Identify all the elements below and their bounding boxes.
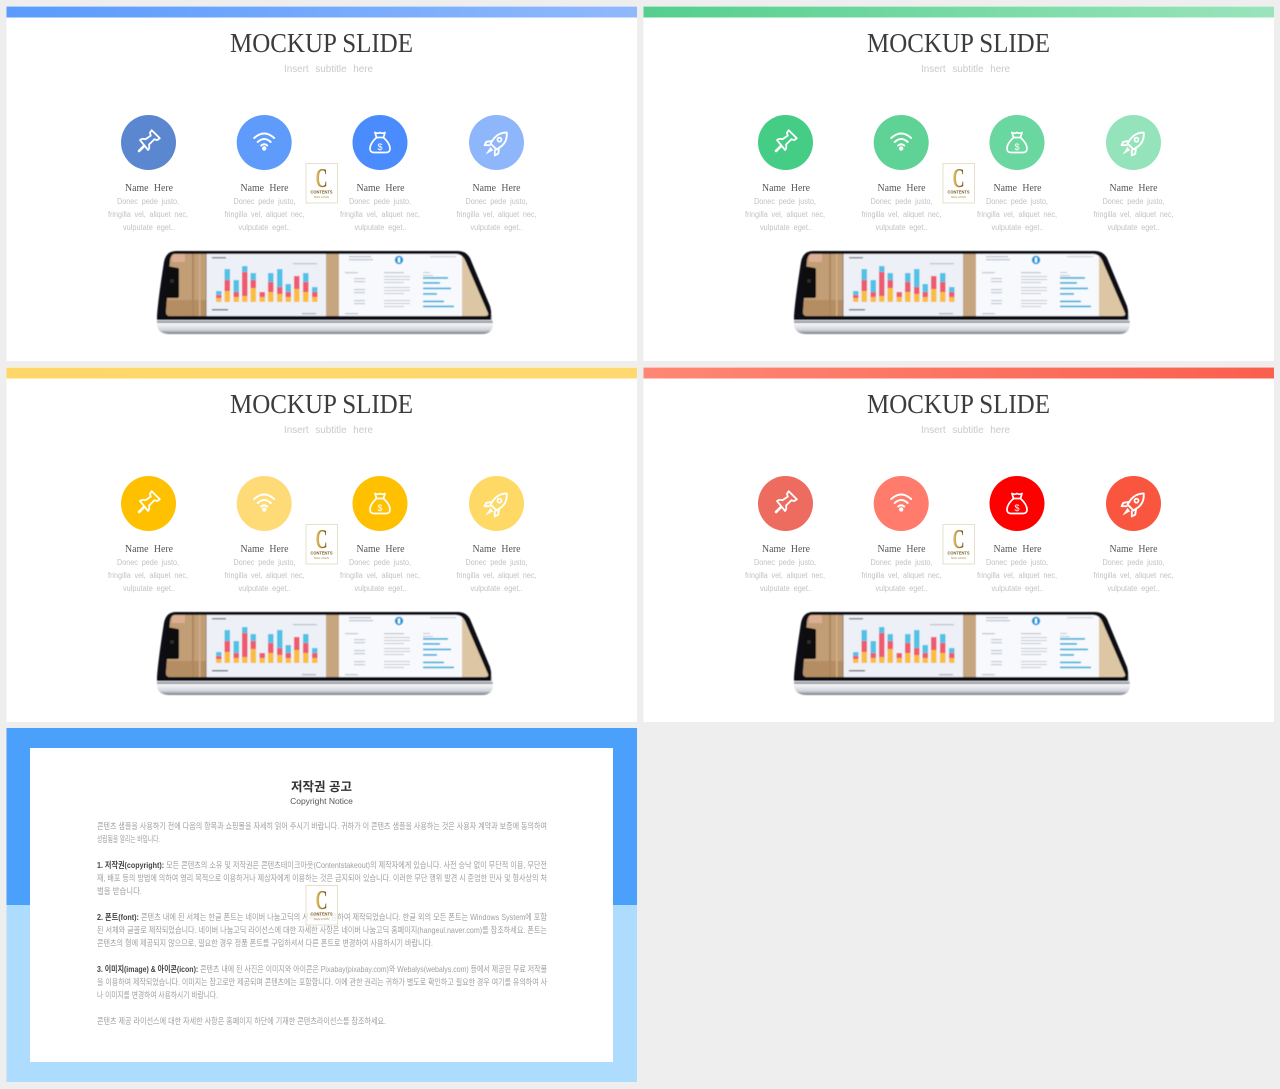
panel: yellow mockup slide: Donec pede justo, (466, 558, 528, 567)
panel: copyright notice: 저작권 공고 (291, 779, 352, 794)
panel: blue mockup slide: fringilla vel, aliquet nec, (108, 210, 188, 219)
panel: blue mockup slide: fringilla vel, aliquet nec, (456, 210, 536, 219)
panel: yellow mockup slide: $ (377, 503, 383, 513)
panel: yellow mockup slide: Name Here (356, 544, 405, 555)
panel: yellow mockup slide: C (316, 524, 328, 554)
panel: red mockup slide: $ (1014, 503, 1020, 513)
panel: green mockup slide: Insert subtitle here (921, 64, 1010, 75)
panel: copyright notice: 콘텐츠 제공 라이선스에 대한 자세한 사항은 홈페이지 하단에 기재한 콘텐츠라이선스를 참조하세요. (97, 1016, 386, 1026)
panel: green mockup slide: MOCKUP SLIDE (867, 28, 1050, 58)
panel: blue mockup slide: vulputate eget.. (470, 223, 522, 232)
panel: red mockup slide: Name Here (1110, 544, 1158, 555)
panel: yellow mockup slide: MOCKUP SLIDE (230, 389, 413, 419)
panel: green mockup slide: $ (1014, 142, 1020, 152)
panel: red mockup slide: Donec pede justo, (754, 558, 816, 567)
panel: blue mockup slide: Donec pede justo, (466, 197, 528, 206)
panel: green mockup slide: fringilla vel, aliquet nec, (745, 210, 825, 219)
panel: yellow mockup slide: fringilla vel, aliquet nec, (340, 571, 420, 580)
panel: copyright notice: 재, 배포 등의 방법에 의하여 영리 목적으로 이용하거나 제삼자에게 이용하는 것은 금지되어 있습니다. 이러한 무단 행위 발견 시 준엄한 민사 및 형사상의 처 (97, 873, 547, 883)
panel: green mockup slide: Name Here (994, 183, 1042, 194)
panel: yellow mockup slide: Name Here (240, 544, 289, 555)
panel: red mockup slide: fringilla vel, aliquet nec, (1094, 571, 1174, 580)
panel: yellow mockup slide: Name Here (125, 544, 174, 555)
panel: blue mockup slide: Donec pede justo, (117, 197, 179, 206)
panel: green mockup slide: Donec pede justo, (870, 197, 932, 206)
panel: yellow mockup slide: Donec pede justo, (349, 558, 411, 567)
panel: red mockup slide: vulputate eget.. (1108, 584, 1160, 593)
panel: green mockup slide: vulputate eget.. (760, 223, 812, 232)
panel: blue mockup slide: Name Here (472, 183, 521, 194)
panel: blue mockup slide: Name Here (356, 183, 405, 194)
panel: copyright notice: 2. 폰트(font): 콘텐츠 내에 된 서체는 한글 폰트는 네이버 나눔고딕의 서체를 이용하여 제작되었습니다. 한글 외의 모든 폰트는 Windows System에 포함 (97, 912, 547, 922)
panel: yellow mockup slide: Name Here (472, 544, 521, 555)
panel: yellow mockup slide: Insert subtitle here (284, 425, 373, 436)
panel: blue mockup slide: vulputate eget.. (238, 223, 290, 232)
panel: copyright notice: MAIL LOGIN (314, 917, 329, 921)
panel: yellow mockup slide: Donec pede justo, (234, 558, 296, 567)
panel: blue mockup slide: Donec pede justo, (234, 197, 296, 206)
panel: yellow mockup slide: vulputate eget.. (123, 584, 175, 593)
panel: red mockup slide: vulputate eget.. (992, 584, 1044, 593)
panel: red mockup slide: fringilla vel, aliquet nec, (862, 571, 942, 580)
panel: copyright notice: 을 이용하여 제작되었습니다. 이미지는 참고로만 제공되며 콘텐츠에는 포함합니다. 이에 관한 권리는 귀하가 별도로 확인하고 필요한 경우 여기를 유의하여 사 (97, 977, 547, 987)
panel: red mockup slide: Donec pede justo, (1102, 558, 1164, 567)
panel: red mockup slide: C (952, 524, 964, 554)
panel: green mockup slide: Donec pede justo, (986, 197, 1048, 206)
panel: blue mockup slide: Name Here (125, 183, 174, 194)
panel: copyright notice: Copyright Notice (290, 796, 353, 806)
panel: yellow mockup slide: fringilla vel, aliquet nec, (224, 571, 304, 580)
panel: blue mockup slide: fringilla vel, aliquet nec, (340, 210, 420, 219)
panel: green mockup slide: vulputate eget.. (1108, 223, 1160, 232)
panel: yellow mockup slide: CONTENTS (310, 550, 332, 556)
panel: copyright notice: 나 이미지를 변경하여 사용하시기 바랍니다. (97, 990, 218, 1000)
panel: copyright notice: 된 서체와 글꼴로 제작되었습니다. 네이버 나눔고딕 라이선스에 대한 자세한 사항은 네이버 나눔고딕 홈페이지(hangeul.naver.com)를 참조하세요. 폰트는 (97, 925, 547, 935)
panel: copyright notice: 콘텐츠의 형에 제공되지 않으므로, 필요한 경우 정품 폰트를 구입하셔서 다른 폰트로 변경하여 사용하시기 바랍니다. (97, 938, 433, 948)
panel: green mockup slide: Name Here (1110, 183, 1158, 194)
panel: red mockup slide: fringilla vel, aliquet nec, (745, 571, 825, 580)
panel: copyright notice: 콘텐츠 샘플을 사용하기 전에 다음의 항목과 쇼핑몰을 자세히 읽어 주시기 바랍니다. 귀하가 이 콘텐츠 샘플을 사용하는 것은 사용자 계약과 보증에 동의하여 (97, 821, 547, 831)
panel: copyright notice: 3. 이미지(image) & 아이콘(icon): 콘텐츠 내에 된 사진은 이미지와 아이콘은 Pixabay(pixabay.com)와 Webalys(webalys.com) 등에서 제공된 무료 저작물 (97, 964, 547, 974)
panel: red mockup slide: fringilla vel, aliquet nec, (977, 571, 1057, 580)
panel: blue mockup slide (6, 6, 637, 361)
panel: copyright notice: CONTENTS (310, 912, 332, 916)
panel: red mockup slide: vulputate eget.. (760, 584, 812, 593)
panel: red mockup slide: vulputate eget.. (876, 584, 928, 593)
panel: blue mockup slide: Donec pede justo, (349, 197, 411, 206)
panel: copyright notice: 1. 저작권(copyright): 모든 콘텐츠의 소유 및 저작권은 콘텐츠테이크아웃(Contentstakeout)의 제작자에게 있습니다. 사전 승낙 없이 무단적 이용, 무단전 (97, 860, 547, 870)
panel: blue mockup slide: CONTENTS (310, 190, 332, 194)
panel: red mockup slide: MAIL LOGIN (951, 556, 966, 560)
panel: copyright notice: 벌을 받습니다. (97, 886, 142, 896)
panel: green mockup slide: Name Here (878, 183, 926, 194)
panel: blue mockup slide: Name Here (240, 183, 289, 194)
panel: green mockup slide: vulputate eget.. (992, 223, 1044, 232)
panel: blue mockup slide: vulputate eget.. (123, 223, 175, 232)
panel: yellow mockup slide: MAIL LOGIN (314, 556, 329, 560)
panel: green mockup slide: MAIL LOGIN (951, 195, 966, 199)
panel: green mockup slide: vulputate eget.. (876, 223, 928, 232)
panel: copyright notice: C (316, 885, 328, 915)
panel: copyright notice (6, 728, 637, 1082)
panel: blue mockup slide: MAIL LOGIN (314, 195, 329, 199)
panel: blue mockup slide: Insert subtitle here (284, 64, 373, 75)
panel: blue mockup slide: MOCKUP SLIDE (230, 28, 413, 58)
panel: green mockup slide (644, 6, 1274, 361)
panel: red mockup slide: Name Here (878, 544, 926, 555)
panel: green mockup slide: Name Here (762, 183, 811, 194)
panel: blue mockup slide: fringilla vel, aliquet nec, (224, 210, 304, 219)
panel: green mockup slide: fringilla vel, aliquet nec, (1094, 210, 1174, 219)
panel: red mockup slide: Donec pede justo, (870, 558, 932, 567)
panel: copyright notice: 성립됨을 알리는 바입니다. (97, 834, 160, 844)
panel: red mockup slide: MOCKUP SLIDE (867, 389, 1050, 419)
panel: green mockup slide: CONTENTS (948, 190, 970, 194)
panel: blue mockup slide: vulputate eget.. (354, 223, 406, 232)
panel: yellow mockup slide: vulputate eget.. (470, 584, 522, 593)
panel: yellow mockup slide (6, 367, 637, 722)
panel: blue mockup slide: $ (377, 142, 383, 152)
panel: yellow mockup slide: Donec pede justo, (117, 558, 179, 567)
panel: red mockup slide: Name Here (994, 544, 1042, 555)
panel: blue mockup slide: C (316, 163, 328, 193)
panel: red mockup slide: Name Here (762, 544, 811, 555)
panel: green mockup slide: fringilla vel, aliquet nec, (862, 210, 942, 219)
panel: red mockup slide (644, 367, 1274, 722)
panel: green mockup slide: Donec pede justo, (1102, 197, 1164, 206)
panel: green mockup slide: Donec pede justo, (754, 197, 816, 206)
panel: green mockup slide: C (952, 163, 964, 193)
panel: red mockup slide: Insert subtitle here (921, 425, 1010, 436)
panel: yellow mockup slide: vulputate eget.. (238, 584, 290, 593)
panel: yellow mockup slide: fringilla vel, aliquet nec, (108, 571, 188, 580)
panel: green mockup slide: fringilla vel, aliquet nec, (977, 210, 1057, 219)
panel: red mockup slide: Donec pede justo, (986, 558, 1048, 567)
panel: red mockup slide: CONTENTS (948, 550, 970, 556)
panel: yellow mockup slide: fringilla vel, aliquet nec, (456, 571, 536, 580)
panel: yellow mockup slide: vulputate eget.. (354, 584, 406, 593)
